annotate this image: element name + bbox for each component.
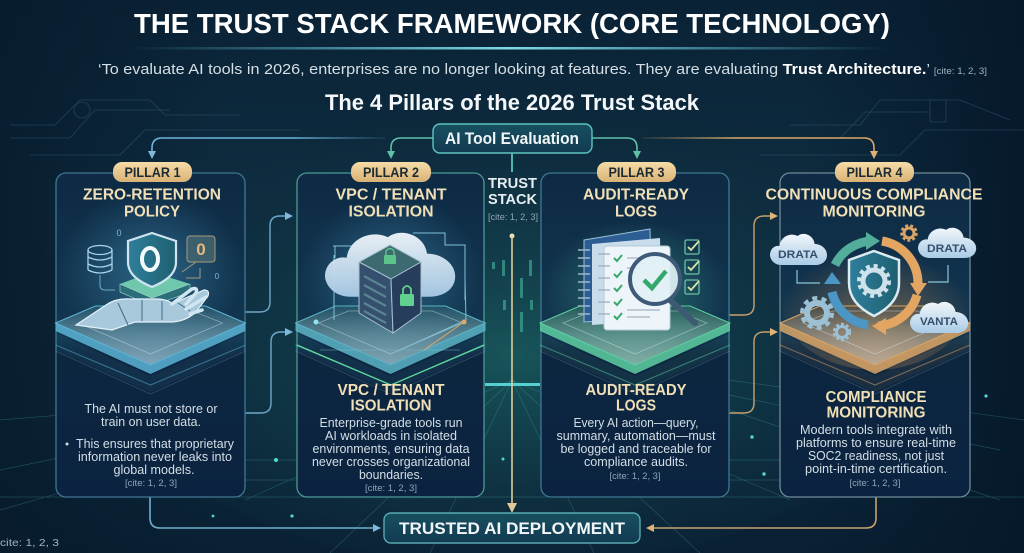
panel: pillar 4 — [766, 162, 983, 497]
trust stack label: [cite: 1, 2, 3] — [488, 212, 538, 222]
body text: Modern tools integrate with — [800, 423, 952, 437]
body text — [312, 416, 470, 493]
trust stack label: TRUST — [488, 176, 537, 192]
heading — [766, 186, 983, 220]
body heading: LOGS — [616, 398, 656, 414]
body text: SOC2 readiness, not just — [808, 449, 945, 463]
badge — [113, 162, 192, 182]
trust stack label: STACK — [488, 192, 538, 208]
icon: cloud server — [314, 233, 466, 350]
body text: [cite: 1, 2, 3] — [610, 471, 660, 481]
icon: compliance cycle — [770, 226, 976, 340]
icon: zero retention shield and robot hand: 0 — [215, 272, 220, 281]
icon: zero retention shield and robot hand — [76, 228, 220, 330]
body heading: MONITORING — [826, 404, 926, 422]
badge — [597, 162, 676, 182]
body text: be logged and traceable for — [560, 442, 712, 456]
pillars subheading: The 4 Pillars of the 2026 Trust Stack — [325, 90, 700, 115]
body heading: ISOLATION — [350, 398, 432, 414]
body text: AI workloads in isolated — [325, 429, 457, 443]
body text: compliance audits. — [584, 455, 688, 469]
body text — [66, 402, 235, 488]
icon: compliance cycle: DRATA — [778, 249, 818, 261]
arrows from evaluation box to pillars — [152, 138, 874, 172]
badge — [835, 162, 914, 182]
body text: boundaries. — [359, 468, 423, 482]
trusted deployment box: TRUSTED AI DEPLOYMENT — [399, 519, 626, 538]
icon: zero retention shield and robot hand: 0 — [116, 228, 122, 238]
evaluation box — [433, 124, 592, 153]
body text: [cite: 1, 2, 3] — [125, 478, 177, 488]
connector: pillar 1 to pillar 2 — [245, 216, 291, 413]
panel: pillar 3 — [540, 162, 730, 497]
heading — [83, 186, 221, 220]
body text: [cite: 1, 2, 3] — [850, 478, 900, 488]
icon: compliance cycle: VANTA — [920, 316, 958, 328]
central trust stack spine — [485, 176, 540, 513]
heading: ZERO-RETENTION — [83, 186, 221, 204]
body text: never crosses organizational — [312, 455, 470, 469]
body text: summary, automation—must — [556, 429, 716, 443]
body text: This ensures that proprietary — [76, 437, 235, 451]
body heading — [826, 389, 927, 422]
platform — [540, 306, 730, 394]
body text — [556, 416, 716, 481]
body heading — [338, 382, 445, 414]
platform — [296, 306, 486, 394]
icon: zero retention shield and robot hand: 0 — [196, 240, 206, 259]
trust stack label — [488, 176, 538, 222]
quote: ‘To evaluate AI tools in 2026, enterprises are no longer looking at features. They are evaluating Trust Architecture. ’ [cite: 1, 2, 3] — [98, 61, 987, 78]
body heading — [586, 382, 687, 414]
body text: environments, ensuring data — [312, 442, 470, 456]
body text: information never leaks into — [78, 450, 232, 464]
connectors to trusted deployment — [150, 497, 876, 528]
body heading: AUDIT-READY — [586, 382, 687, 399]
icon: audit log notebook with magnifier — [578, 229, 699, 330]
heading: MONITORING — [822, 204, 926, 220]
title divider — [130, 47, 890, 50]
body text: Every AI action—query, — [574, 416, 698, 430]
connector: pillar 3 to pillar 4 — [729, 216, 776, 413]
body text: platforms to ensure real-time — [796, 436, 956, 450]
heading: VPC / TENANT — [336, 186, 447, 204]
evaluation box: AI Tool Evaluation — [445, 130, 579, 148]
badge: PILLAR 4 — [846, 165, 903, 180]
panel: pillar 1 — [56, 162, 246, 497]
trusted deployment box — [384, 513, 640, 543]
title: THE TRUST STACK FRAMEWORK (CORE TECHNOLOGY) — [134, 8, 890, 39]
body text: [cite: 1, 2, 3] — [365, 483, 417, 493]
heading: POLICY — [124, 204, 180, 220]
heading: ISOLATION — [348, 204, 434, 220]
body text: The AI must not store or — [84, 402, 218, 416]
body text: train on user data. — [101, 415, 201, 429]
body text: point-in-time certification. — [805, 462, 947, 476]
footer citation: cite: 1, 2, 3 — [0, 538, 60, 549]
panel: pillar 2 — [296, 162, 486, 497]
heading: CONTINUOUS COMPLIANCE — [766, 186, 983, 204]
badge: PILLAR 3 — [608, 165, 665, 180]
heading: LOGS — [615, 204, 657, 220]
heading — [583, 186, 689, 220]
heading — [336, 186, 447, 220]
platform — [780, 306, 970, 394]
body heading: COMPLIANCE — [826, 389, 927, 406]
body text — [796, 423, 956, 488]
badge — [351, 162, 431, 182]
body text: global models. — [114, 463, 194, 477]
icon: compliance cycle: DRATA — [927, 243, 967, 255]
body heading: VPC / TENANT — [338, 382, 445, 399]
platform — [56, 306, 246, 394]
body text: Enterprise-grade tools run — [320, 416, 463, 430]
badge: PILLAR 1 — [124, 165, 181, 180]
heading: AUDIT-READY — [583, 186, 689, 204]
badge: PILLAR 2 — [363, 165, 419, 180]
